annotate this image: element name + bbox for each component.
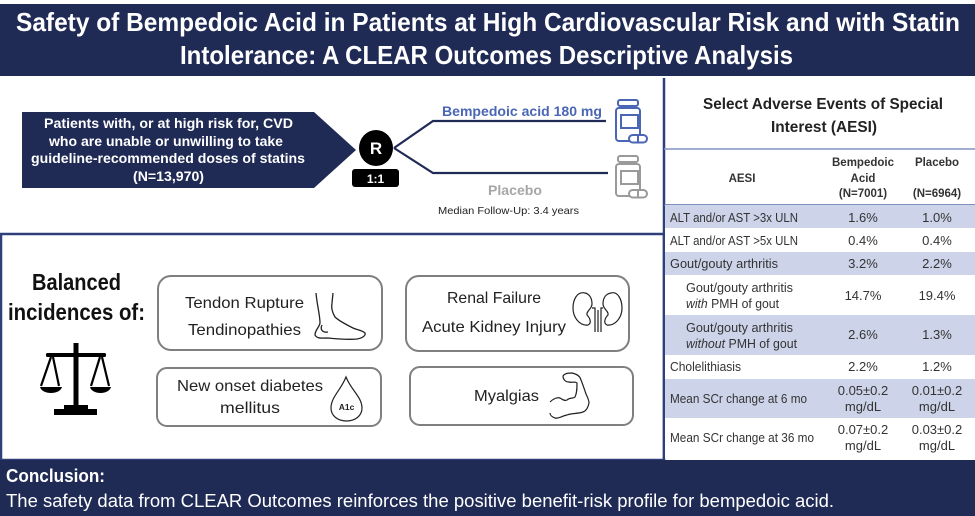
table row: ALT 5x: 0.4% (922, 233, 952, 248)
conclusion bar (0, 460, 975, 516)
randomization circle (359, 130, 393, 166)
card: renal: Renal Failure (447, 290, 541, 307)
table row: gout with PMH: 14.7% (845, 288, 882, 303)
icon: A1c drop (331, 377, 362, 421)
heading: balanced incidences: Balanced (32, 269, 121, 295)
table row: gout without PMH: without PMH of gout (686, 336, 797, 351)
table row: SCr 6 mo: 0.01±0.2 (912, 383, 962, 398)
conclusion bar: The safety data from CLEAR Outcomes reinforces the positive benefit-risk profile for bempedoic acid. (6, 491, 834, 511)
table row: gout (665, 252, 975, 275)
population arrow: guideline-recommended doses of statins (31, 151, 305, 166)
table row: SCr 36 mo: 0.07±0.2 (838, 422, 888, 437)
table column headers: AESI (729, 173, 755, 185)
table row: gout: 3.2% (848, 256, 878, 271)
table row: SCr 6 mo (665, 379, 975, 418)
icon: flexed arm (550, 373, 589, 418)
table row: cholelithiasis: 1.2% (922, 359, 952, 374)
table row: gout with PMH: with PMH of gout (686, 296, 779, 311)
table row: ALT 3x (665, 205, 975, 228)
panel: balanced incidences (1, 234, 664, 460)
table row: ALT 3x: ALT and/or AST >3x ULN (670, 210, 798, 225)
table column headers (729, 157, 961, 200)
bempedoic acid label: Bempedoic acid 180 mg (442, 103, 602, 119)
table column headers: Placebo (915, 157, 959, 169)
table row: gout without PMH: Gout/gouty arthritis (686, 320, 793, 335)
conclusion bar: Conclusion: (6, 466, 105, 486)
icon: kidneys (573, 293, 622, 332)
card: tendon: Tendon Rupture (185, 295, 304, 312)
card: diabetes: New onset diabetes (177, 378, 323, 395)
table heading: Interest (AESI) (771, 119, 877, 136)
table row: SCr 6 mo: mg/dL (845, 399, 881, 414)
table row: gout with PMH (665, 275, 975, 315)
table row: SCr 36 mo (665, 418, 975, 458)
table heading (703, 96, 943, 136)
icon: bempedoic acid bottle (616, 100, 647, 142)
table row: cholelithiasis: 2.2% (848, 359, 878, 374)
table row: cholelithiasis: Cholelithiasis (670, 359, 741, 374)
population arrow: (N=13,970) (133, 169, 204, 184)
table row: SCr 6 mo: mg/dL (919, 399, 955, 414)
table row: ALT 3x: 1.6% (848, 210, 878, 225)
table column headers: Acid (851, 173, 875, 185)
population arrow: Patients with, or at high risk for, CVD (44, 116, 293, 131)
icon: foot (315, 293, 365, 339)
title banner (0, 4, 975, 76)
population arrow (22, 112, 356, 188)
table row: gout: Gout/gouty arthritis (670, 256, 778, 271)
card: diabetes: mellitus (220, 400, 280, 417)
card: diabetes (157, 368, 381, 426)
randomization circle: R (370, 139, 382, 158)
table column headers: Bempedoic (832, 157, 895, 169)
table row: gout without PMH: 2.6% (848, 327, 878, 342)
icon: balance scale (40, 343, 111, 415)
table row: ALT 5x (665, 228, 975, 252)
table row: SCr 36 mo: 0.03±0.2 (912, 422, 962, 437)
table row: cholelithiasis (665, 355, 975, 379)
heading: balanced incidences (8, 269, 145, 325)
follow-up note: Median Follow-Up: 3.4 years (438, 205, 579, 217)
arrow: treatment arm lines (394, 121, 608, 173)
card: tendon: Tendinopathies (188, 322, 301, 339)
panel: trial design (22, 100, 647, 217)
ratio badge (352, 169, 399, 187)
table column headers: (N=7001) (839, 188, 887, 200)
table row: gout with PMH: 19.4% (919, 288, 956, 303)
heading: balanced incidences: incidences of: (8, 299, 145, 325)
table row: ALT 3x: 1.0% (922, 210, 952, 225)
table row: SCr 36 mo: Mean SCr change at 36 mo (670, 430, 814, 445)
title banner: Intolerance: A CLEAR Outcomes Descriptive Analysis (180, 40, 793, 70)
table row: ALT 5x: ALT and/or AST >5x ULN (670, 233, 798, 248)
table row: SCr 36 mo: mg/dL (919, 438, 955, 453)
panel: AESI table (664, 78, 975, 460)
table row: gout without PMH (665, 315, 975, 355)
placebo label: Placebo (488, 182, 542, 198)
card: myalgias: Myalgias (474, 388, 539, 405)
table row: gout with PMH: Gout/gouty arthritis (686, 280, 793, 295)
card: renal: Acute Kidney Injury (422, 319, 566, 336)
table row: ALT 5x: 0.4% (848, 233, 878, 248)
population arrow: who are unable or unwilling to take (48, 134, 284, 149)
table row: gout: 2.2% (922, 256, 952, 271)
table row: SCr 36 mo: mg/dL (845, 438, 881, 453)
table row: SCr 6 mo: Mean SCr change at 6 mo (670, 391, 807, 406)
table row: gout without PMH: 1.3% (922, 327, 952, 342)
table column headers: (N=6964) (913, 188, 961, 200)
table heading: Select Adverse Events of Special (703, 96, 943, 113)
table row: SCr 6 mo: 0.05±0.2 (838, 383, 888, 398)
icon: placebo bottle (616, 156, 647, 198)
icon: A1c drop: A1c (339, 402, 355, 412)
card: myalgias (410, 367, 633, 425)
card: renal (406, 276, 629, 351)
card: tendon (158, 276, 382, 350)
ratio badge: 1:1 (367, 172, 384, 186)
